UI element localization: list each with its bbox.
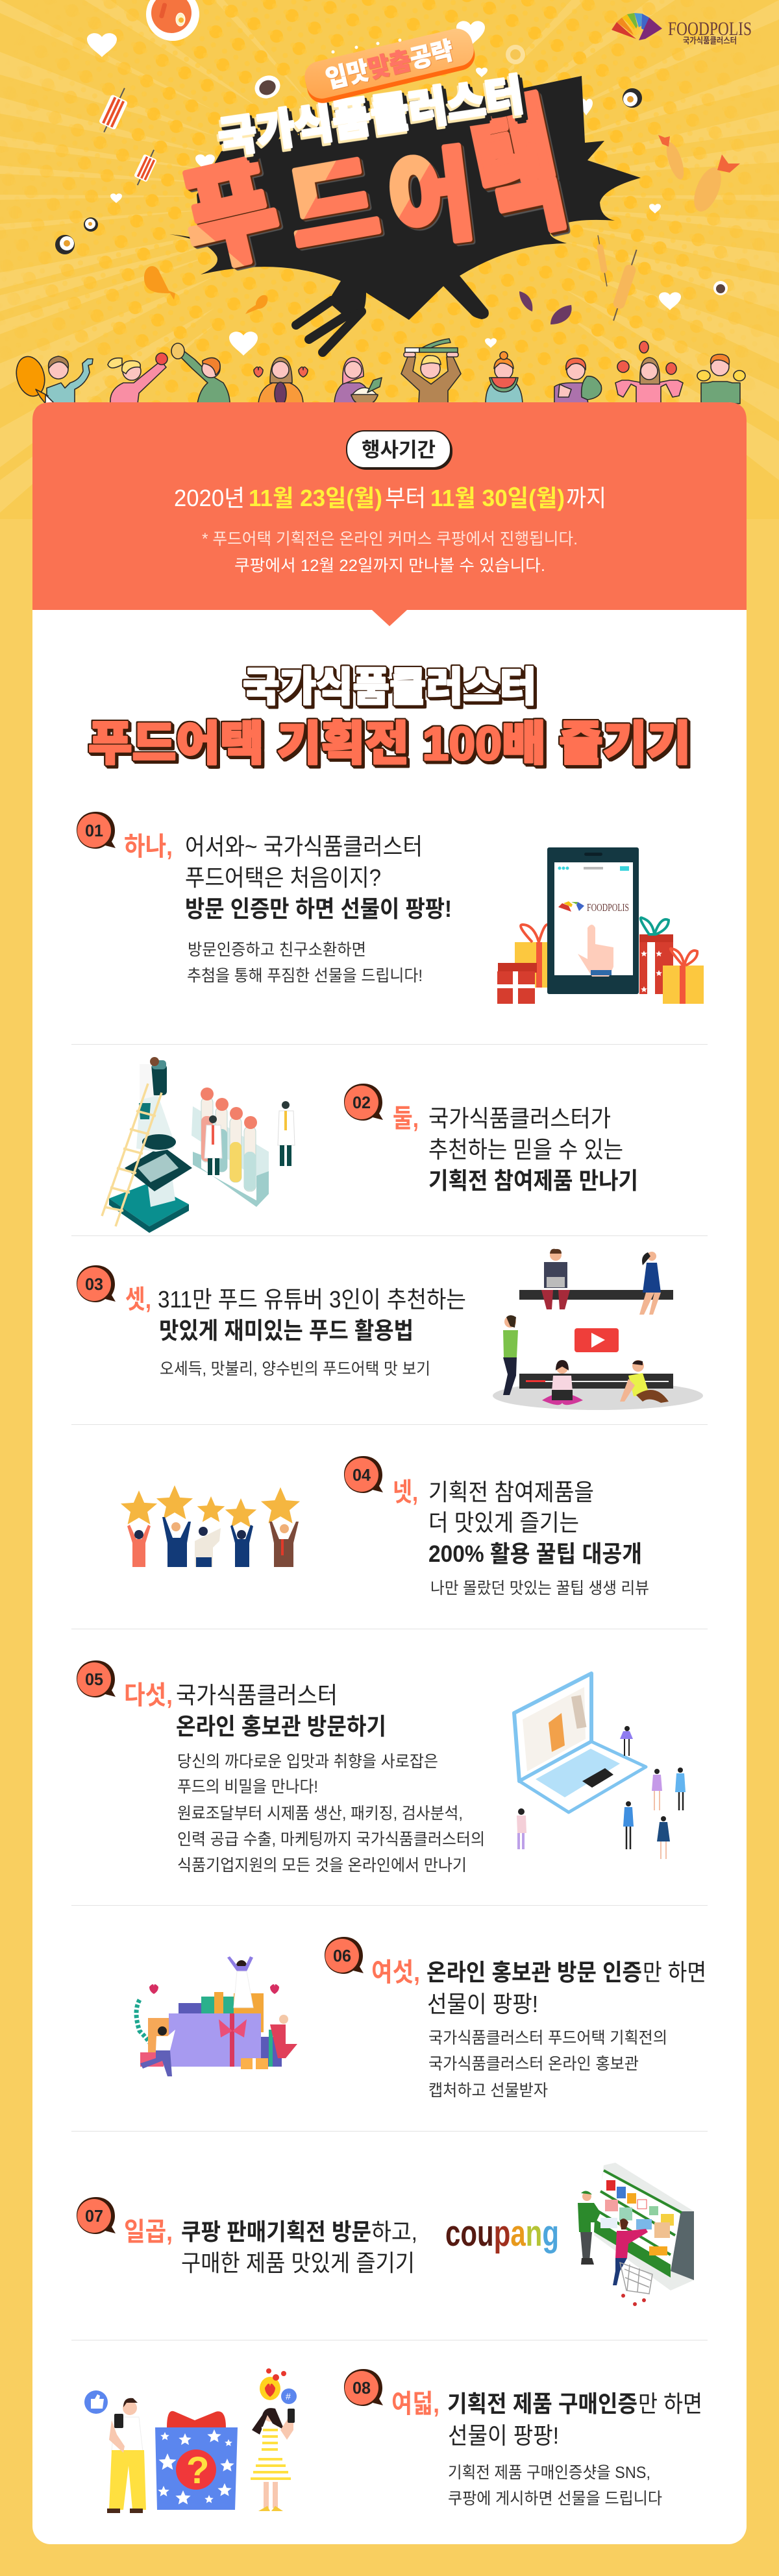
badge: 01: 01 [85, 821, 103, 840]
text: event dates: 까지 [566, 485, 606, 511]
illustration: mystery gift and sharing couple: ? [186, 2449, 209, 2492]
hero pill: 입맛맞춤공략 [301, 25, 478, 106]
character: man with drumstick [12, 354, 93, 407]
text: step 01 copy: 푸드어택은 처음이지? [185, 864, 381, 891]
hero title: 푸드어택: 드 [280, 145, 386, 268]
badge: 04 [344, 1456, 383, 1493]
badge: 05 [77, 1660, 116, 1697]
text: step 05 copy: 인력 공급 수출, 마케팅까지 국가식품클러스터의 [177, 1830, 485, 1849]
text: step 03 copy: 오세득, 맛불리, 양수빈의 푸드어택 맛 보기 [160, 1360, 430, 1378]
badge: 06: 06 [333, 1946, 351, 1965]
text: step 05 copy: 당신의 까다로운 입맛과 취향을 사로잡은 [177, 1753, 438, 1771]
text: step 04 copy: 기획전 참여제품을 [428, 1479, 594, 1505]
badge: 02: 02 [352, 1093, 371, 1112]
text: step 08 copy: 쿠팡에 게시하면 선물을 드립니다 [448, 2490, 662, 2508]
text: step 04 copy: 200% 활용 꿀팁 대공개 [428, 1540, 642, 1567]
text: step 06 copy: 국가식품클러스터 온라인 홍보관 [428, 2055, 639, 2073]
logo: foodpolis [612, 13, 752, 45]
panel: step 03 [77, 1249, 703, 1410]
heading: section title: 국가식품클러스터 [243, 665, 536, 710]
badge: 07: 07 [85, 2206, 103, 2226]
text: event dates: 부터 [385, 485, 426, 511]
icon: kimbap rolls [55, 88, 642, 254]
panel: main white card [32, 402, 747, 2544]
logo: coupang: coupang [445, 2213, 559, 2254]
text: step 03 copy: 311만 푸드 유튜버 3인이 추천하는 [158, 1286, 466, 1313]
badge: 행사기간: 행사기간 [362, 439, 436, 461]
icon: white hearts [87, 21, 681, 356]
badge: 05: 05 [85, 1670, 103, 1689]
heading: section title: 푸드어택 기획전 100배 즐기기 [88, 718, 691, 770]
badge: 06 [325, 1937, 364, 1974]
panel: step 04 [121, 1456, 649, 1598]
panel: step 07 [77, 2163, 694, 2306]
text: step 08 copy: 만 하면 [638, 2390, 702, 2417]
text: event dates: 2020년 [174, 485, 245, 511]
text: step 05 copy: 국가식품클러스터 [176, 1682, 338, 1708]
text: step 08 copy: 기획전 제품 구매인증샷을 SNS, [448, 2464, 650, 2482]
text: step 05 copy: 원료조달부터 시제품 생산, 패키징, 검사분석, [177, 1804, 463, 1823]
hero title: 푸드어택: 택 [461, 84, 575, 259]
text: step 05 copy: 다섯, [124, 1681, 173, 1710]
text: event dates: 11월 30일(월) [430, 485, 565, 511]
panel: step 05 [77, 1660, 686, 1875]
text: step 04 copy [393, 1478, 649, 1598]
panel: event period [32, 402, 747, 626]
badge: 08: 08 [352, 2378, 371, 2398]
icon: play button [575, 1328, 619, 1352]
illustration: gift pile celebration [136, 1956, 297, 2076]
badge: 03 [77, 1265, 116, 1302]
hero food and heart decorations [55, 0, 752, 356]
hero pill: 입맛맞춤공략: 입맛맞춤공략 [323, 37, 456, 94]
text: step 01 copy: 하나, [124, 832, 173, 861]
text: step 01 copy [124, 832, 452, 985]
illustration: laptop online showroom [514, 1673, 686, 1859]
text: step 06 copy: 여섯, [371, 1958, 420, 1987]
text: step 02 copy: 기획전 참여제품 만나기 [428, 1167, 638, 1194]
text: step 06 copy [371, 1958, 706, 2100]
text: event note [202, 530, 578, 575]
text: step 06 copy: 온라인 홍보관 방문 인증 [427, 1959, 642, 1986]
character: woman juggling tomatoes [615, 341, 683, 404]
text: step 05 copy: 푸드의 비밀을 만나다! [177, 1778, 318, 1796]
icon: drumsticks [144, 266, 267, 314]
panel: step 06 [136, 1937, 706, 2100]
badge: 02 [344, 1084, 383, 1121]
hero title: 국가식품클러스터: 국가식품클러스터 [215, 70, 526, 162]
text: step 08 copy [391, 2390, 702, 2508]
text: step 03 copy [125, 1285, 466, 1378]
hero character row [12, 339, 745, 407]
panel: step 02 [102, 1057, 638, 1233]
badge: 08 [344, 2369, 383, 2406]
badge: 03: 03 [85, 1274, 103, 1294]
hero title: 푸드어택 [172, 84, 575, 287]
text: step 02 copy: 둘, [393, 1104, 419, 1133]
panel: step 08 [84, 2368, 702, 2513]
character: man with scallion [401, 339, 461, 404]
text: step 01 copy: 어서와~ 국가식품클러스터 [185, 833, 423, 860]
text: step 01 copy: 방문인증하고 친구소환하면 [188, 941, 366, 959]
text: event dates [174, 485, 606, 511]
logo: foodpolis: 국가식품클러스터 [683, 36, 737, 45]
heading: section title [88, 665, 691, 770]
text: step 04 copy: 나만 몰랐던 맛있는 꿀팁 생생 리뷰 [430, 1579, 649, 1598]
illustration: mystery gift and sharing couple [84, 2368, 297, 2513]
badge: 04: 04 [352, 1465, 371, 1485]
character: woman with sweet potato [254, 358, 308, 406]
text: step 03 copy: 셋, [125, 1285, 151, 1314]
text: step 07 copy [124, 2218, 417, 2276]
hero title burst and fork [169, 76, 641, 352]
text: step 08 copy: 기획전 제품 구매인증 [447, 2390, 637, 2417]
text: event note: 쿠팡에서 12월 22일까지 만나볼 수 있습니다. [234, 557, 545, 575]
hero background rays and halftone [0, 0, 779, 519]
icon: orange slice [506, 45, 525, 64]
illustration: mystery gift and sharing couple: # [286, 2391, 291, 2401]
text: step 07 copy: 일곱, [124, 2218, 173, 2246]
illustration: people holding stars [121, 1485, 300, 1567]
text: step 05 copy: 식품기업지원의 모든 것을 온라인에서 만나기 [177, 1856, 467, 1875]
text: step 02 copy [393, 1104, 638, 1194]
text: step 07 copy: 구매한 제품 맛있게 즐기기 [181, 2250, 415, 2276]
text: step 06 copy: 만 하면 [643, 1959, 706, 1986]
icon: skewers [96, 84, 642, 322]
icon: tteokbokki bowl [146, 0, 199, 41]
character: man with spinach [554, 358, 602, 404]
logo: foodpolis: FOODPOLIS [668, 18, 752, 40]
text: step 02 copy: 국가식품클러스터가 [428, 1105, 611, 1132]
illustration: phone with gifts [497, 847, 704, 1004]
text: step 05 copy: 온라인 홍보관 방문하기 [176, 1713, 386, 1740]
icon: fried shrimp [658, 135, 740, 215]
badge: 행사기간 [347, 431, 452, 470]
text: step 08 copy: 여덟, [391, 2390, 439, 2418]
icon: sweet potatoes [519, 291, 572, 324]
text: step 08 copy: 선물이 팡팡! [448, 2422, 559, 2449]
text: step 03 copy: 맛있게 재미있는 푸드 활용법 [159, 1317, 414, 1344]
text: step 04 copy: 넷, [393, 1478, 418, 1507]
icon: rice cakes [251, 71, 728, 295]
character: woman with bowl [334, 358, 382, 405]
text: step 06 copy: 캡처하고 선물받자 [428, 2082, 548, 2100]
hero title: 푸드어택: 푸 [172, 144, 290, 287]
character: boy with pear [171, 343, 230, 404]
text: step 02 copy: 추천하는 믿을 수 있는 [428, 1136, 623, 1163]
text: step 01 copy: 방문 인증만 하면 선물이 팡팡! [185, 895, 452, 922]
text: event dates: 11월 23일(월) [249, 485, 382, 511]
badge: 01 [77, 812, 116, 849]
text: step 07 copy: 하고, [371, 2218, 417, 2245]
dividers [71, 1044, 708, 2340]
illustration: microscope lab [102, 1057, 295, 1233]
panel: step 01 [77, 812, 704, 1004]
character: girl with apple [108, 353, 167, 404]
text: step 06 copy: 선물이 팡팡! [427, 1991, 538, 2017]
illustration: phone with gifts: FOODPOLIS [587, 901, 629, 914]
text: step 04 copy: 더 맛있게 즐기는 [428, 1509, 579, 1536]
character: man with lemons [697, 354, 745, 404]
text: event note: * 푸드어택 기획전은 온라인 커머스 쿠팡에서 진행됩니다. [202, 530, 578, 548]
text: step 07 copy: 쿠팡 판매기획전 방문 [181, 2218, 371, 2245]
text: step 01 copy: 추첨을 통해 푸짐한 선물을 드립니다! [187, 967, 423, 985]
badge: 07 [77, 2197, 116, 2234]
text: step 06 copy: 국가식품클러스터 푸드어택 기획전의 [428, 2029, 667, 2047]
illustration: youtube viewers [493, 1249, 703, 1410]
text: step 05 copy [124, 1681, 485, 1875]
character: woman with watermelon [486, 352, 523, 404]
illustration: supermarket shelf [578, 2163, 694, 2306]
icon: rainbow fan [612, 13, 662, 40]
hero title: 푸드어택: 어 [382, 139, 480, 260]
